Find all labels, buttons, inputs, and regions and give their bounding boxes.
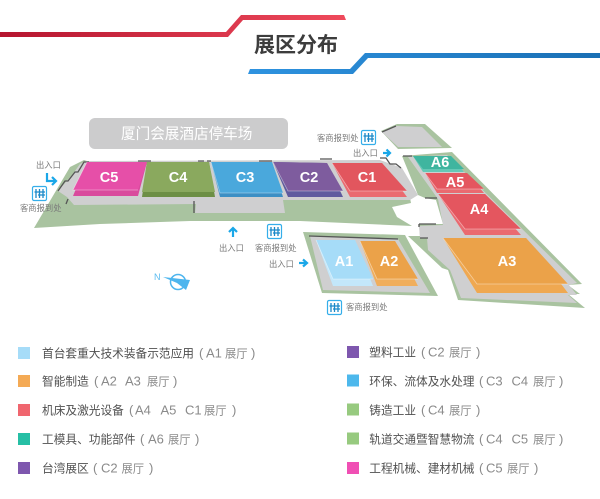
legend: C5: ( [479, 460, 484, 476]
legend: Taiwan C2: ( [93, 460, 98, 476]
legend: C4 C5: 轨道交通暨智慧物流 [369, 432, 475, 446]
entrance A1 A2 [269, 259, 307, 269]
parking lot: 厦门会展酒店停车场 [121, 126, 252, 142]
A1 A2 ground [303, 232, 438, 296]
legend: A6: 工模具、功能部件 [42, 432, 136, 446]
legend: A4 A5 C1: C1 [185, 402, 202, 418]
legend: C4 C5: C4 [486, 432, 503, 446]
hall A1 [316, 240, 373, 286]
reception north [317, 130, 376, 144]
entrance south: 出入口 [219, 243, 244, 253]
compass [154, 272, 190, 290]
compass: N [154, 272, 160, 282]
hall A3: A3 [498, 254, 516, 270]
top right ground block [381, 124, 452, 149]
hall A5: A5 [446, 175, 464, 191]
legend: A4 A5 C1: ( [129, 402, 134, 418]
parking lot [89, 118, 288, 149]
legend: plastics C2: C2 [428, 344, 445, 360]
legend: C5: 工程机械、建材机械 [369, 462, 475, 476]
legend: A4 A5 C1 [18, 402, 236, 418]
legend: A6: ) [195, 432, 199, 446]
legend: A1: 首台套重大技术装备示范应用 [42, 346, 194, 360]
legend: A6: A6 [148, 432, 164, 446]
legend: C4 C5: ) [559, 432, 563, 446]
legend: C4 C5: ( [479, 432, 484, 446]
legend: plastics C2: 展厅 [449, 346, 472, 360]
header ribbon: red [0, 15, 346, 37]
hall A6 [413, 155, 464, 172]
hall C2 [273, 162, 343, 197]
hall A2: A2 [380, 254, 398, 270]
hall C1: C1 [358, 170, 376, 186]
legend: A6 [18, 432, 199, 446]
entrance north: 出入口 [353, 148, 378, 158]
legend: A1: 展厅 [225, 348, 248, 360]
legend: A2 A3: 智能制造 [42, 374, 89, 388]
reception west [20, 186, 62, 213]
legend: foundry C4: ( [421, 402, 426, 418]
legend: C5 [347, 460, 538, 476]
legend: foundry C4: ) [476, 402, 480, 418]
hall A2 [360, 241, 418, 286]
A zone east ground [402, 152, 585, 308]
legend: foundry C4: 铸造工业 [369, 404, 416, 418]
legend: C5: ) [534, 460, 538, 476]
legend: C3 C4: C4 [512, 374, 528, 388]
legend: C5: 展厅 [507, 462, 530, 476]
legend: A2 A3: A3 [125, 374, 141, 388]
hall C3: C3 [236, 170, 254, 186]
legend: C4 C5: C5 [512, 432, 528, 446]
legend: Taiwan C2 [18, 460, 153, 476]
legend: C4 C5 [347, 432, 563, 446]
entrance A1 A2: 出入口 [269, 259, 294, 269]
hall C3 [211, 162, 283, 197]
legend: A6: 展厅 [168, 434, 191, 446]
legend: A1: ) [251, 346, 255, 360]
legend: A4 A5 C1: ) [232, 402, 236, 418]
hall A3 [443, 238, 568, 293]
entrance north [353, 148, 390, 158]
legend: C3 C4: ( [479, 374, 484, 388]
legend: C3 C4: ) [559, 374, 563, 388]
reception south east [328, 300, 388, 314]
legend: A2 A3: A2 [101, 374, 117, 388]
reception north: 客商报到处 [317, 133, 358, 143]
hall C5 [73, 162, 147, 196]
legend: A2 A3 [18, 374, 177, 388]
legend: Taiwan C2: C2 [101, 460, 118, 476]
legend: A4 A5 C1: 机床及激光设备 [42, 404, 124, 418]
legend: A1: A1 [206, 346, 222, 360]
hall C2: C2 [300, 170, 318, 186]
hall C5: C5 [100, 170, 118, 186]
legend: Taiwan C2: 展厅 [122, 462, 144, 476]
hall A6: A6 [431, 155, 449, 171]
reception south: 客商报到处 [255, 243, 296, 253]
hall C1 [332, 163, 407, 197]
reception south east: 客商报到处 [346, 302, 388, 312]
legend: C4 C5: 展厅 [533, 434, 556, 446]
reception south [255, 224, 296, 253]
hall C4 [142, 162, 215, 197]
legend: A1: ( [199, 346, 204, 360]
legend: A1 [18, 346, 255, 360]
legend: plastics C2: ) [476, 344, 480, 360]
hall A4: A4 [470, 202, 488, 218]
legend: foundry C4: 展厅 [449, 404, 472, 418]
legend: A2 A3: ) [173, 374, 177, 388]
legend: plastics C2: ( [421, 344, 426, 360]
legend: A2 A3: ( [94, 374, 99, 388]
hall A1: A1 [335, 254, 353, 270]
legend: Taiwan C2: 台湾展区 [42, 462, 89, 476]
legend: A4 A5 C1: 展厅 [204, 404, 227, 418]
legend: A6: ( [140, 432, 145, 446]
entrance west: 出入口 [36, 160, 61, 170]
entrance west [36, 160, 61, 185]
legend: C3 C4: C3 [486, 374, 503, 388]
legend: C3 C4: 展厅 [533, 376, 556, 388]
hall A4 [438, 194, 521, 235]
legend: A4 A5 C1: A4 [135, 402, 151, 418]
legend: foundry C4 [347, 402, 480, 418]
entrance south [219, 228, 244, 253]
header ribbon: blue [248, 53, 600, 74]
legend: C3 C4: 环保、流体及水处理 [369, 374, 475, 388]
legend: C5: C5 [486, 460, 503, 476]
legend: plastics C2 [347, 344, 480, 360]
hall A5 [425, 173, 484, 193]
title: 展区分布 [254, 34, 338, 57]
legend: plastics C2: 塑料工业 [369, 346, 416, 360]
hall C4: C4 [169, 170, 187, 186]
legend: A2 A3: 展厅 [147, 376, 170, 388]
legend: foundry C4: C4 [428, 402, 445, 418]
legend: A4 A5 C1: A5 [160, 402, 176, 418]
legend: C3 C4 [347, 374, 563, 388]
reception west: 客商报到处 [20, 203, 62, 213]
C zone ground [34, 158, 418, 228]
legend: Taiwan C2: ) [149, 460, 153, 476]
